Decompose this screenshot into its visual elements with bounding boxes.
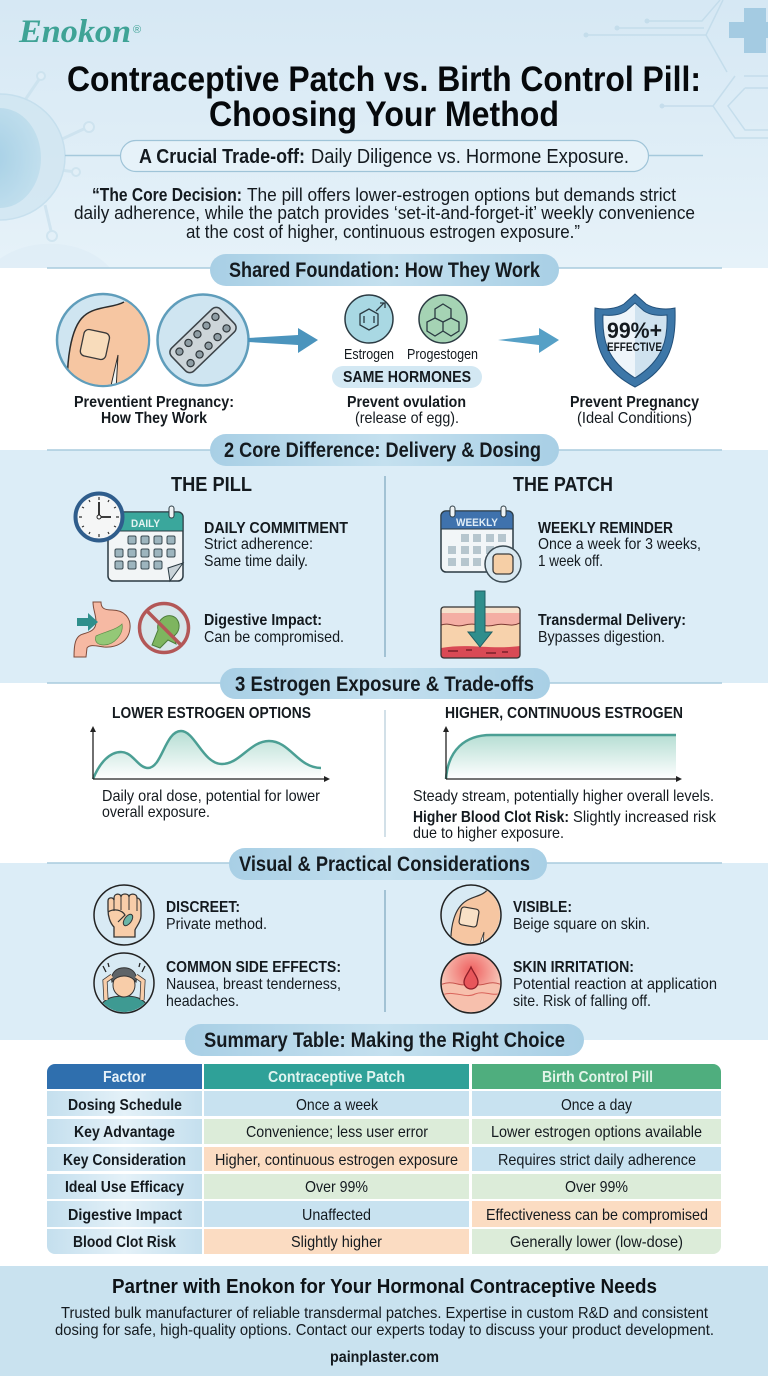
label: progestogen: Progestogen <box>407 347 478 363</box>
subtitle pill: A Crucial Trade-off: <box>139 146 305 168</box>
row: key consideration: Higher, continuous estrogen exposure <box>215 1152 458 1169</box>
section heading: shared foundation <box>47 254 722 286</box>
table header <box>47 1064 721 1089</box>
text: visible <box>513 899 650 933</box>
arrow <box>248 328 318 353</box>
icon: patch on arm <box>57 294 152 392</box>
icon: stomach with pill <box>74 602 130 657</box>
icon: shield 99% effective <box>595 294 675 387</box>
row: ideal use efficacy <box>47 1174 721 1199</box>
row: blood clot risk: Blood Clot Risk <box>73 1234 176 1251</box>
text: daily commitment: Same time daily. <box>204 553 308 570</box>
heading: higher continuous estrogen: HIGHER, CONTINUOUS ESTROGEN <box>445 705 683 722</box>
caption: how they work <box>74 394 234 427</box>
icon: daily calendar and clock <box>76 494 183 581</box>
core decision quote: The pill offers lower-estrogen options but demands strict <box>247 184 676 205</box>
subtitle pill <box>65 140 703 172</box>
caption: how they work: Preventient Pregnancy: <box>74 394 234 411</box>
title: Choosing Your Method <box>209 95 559 134</box>
section heading: summary table: Summary Table: Making the Right Choice <box>204 1029 565 1052</box>
text: higher estrogen description: Slightly increased risk <box>573 809 717 826</box>
decoration: molecular circuit lines and plus <box>584 0 768 138</box>
divider <box>384 476 386 657</box>
row: key advantage: Key Advantage <box>74 1124 175 1141</box>
section heading: shared foundation: Shared Foundation: How They Work <box>229 259 540 282</box>
footer description: dosing for safe, high-quality options. Contact our experts today to discuss your product development. <box>55 1322 714 1339</box>
row: digestive impact <box>47 1201 721 1227</box>
caption: how they work: How They Work <box>101 410 207 427</box>
text: common side effects: headaches. <box>166 993 239 1010</box>
footer heading: Partner with Enokon for Your Hormonal Contraceptive Needs <box>112 1275 657 1298</box>
table header: Contraceptive Patch <box>268 1069 405 1086</box>
text: digestive impact <box>204 612 344 646</box>
title <box>67 60 701 134</box>
panel: higher estrogen <box>413 705 717 842</box>
subtitle pill: Daily Diligence vs. Hormone Exposure. <box>311 146 629 168</box>
icon: weekly calendar with patch: WEEKLY <box>456 517 499 529</box>
icon: daily calendar and clock: DAILY <box>131 518 161 530</box>
text: weekly reminder: Once a week for 3 weeks, <box>538 536 701 553</box>
core decision quote: “The Core Decision: <box>92 184 242 205</box>
text: lower estrogen description: overall exposure. <box>102 804 210 821</box>
text: weekly reminder <box>538 520 701 570</box>
heading: the pill: THE PILL <box>171 474 252 496</box>
row: dosing schedule: Dosing Schedule <box>68 1097 182 1114</box>
text: higher estrogen description: Steady stream, potentially higher overall levels. <box>413 788 714 805</box>
icon: visible patch on skin <box>441 885 505 946</box>
label: estrogen: Estrogen <box>344 347 394 363</box>
panel: patch considerations <box>440 885 717 1015</box>
text: higher estrogen description: due to higher exposure. <box>413 825 564 842</box>
icon: skin irritation <box>440 953 502 1015</box>
caption: prevent ovulation <box>347 394 466 427</box>
section heading: visual and practical: Visual & Practical Considerations <box>239 853 530 876</box>
row: key consideration <box>47 1147 721 1171</box>
panel: lower estrogen <box>90 705 330 821</box>
panel: pill considerations <box>94 885 341 1015</box>
title: Contraceptive Patch vs. Birth Control Pill: <box>67 60 701 99</box>
text: common side effects: COMMON SIDE EFFECTS: <box>166 959 341 976</box>
icon: shield 99% effective: 99%+ <box>607 318 662 343</box>
text: transdermal delivery: Transdermal Delivery: <box>538 612 686 629</box>
panel: the pill <box>74 474 348 657</box>
chart: fluctuating estrogen curve <box>90 726 330 782</box>
row: key advantage <box>47 1119 721 1144</box>
row: key advantage: Lower estrogen options available <box>491 1124 702 1141</box>
row: digestive impact: Digestive Impact <box>68 1207 183 1224</box>
footer panel <box>0 1266 768 1376</box>
text: discreet: DISCREET: <box>166 899 240 916</box>
icon: pill blister pack <box>158 294 248 386</box>
text: lower estrogen description: Daily oral dose, potential for lower <box>102 788 321 805</box>
text: daily commitment: Strict adherence: <box>204 536 313 553</box>
text: weekly reminder: 1 week off. <box>538 553 603 570</box>
icon: weekly calendar with patch <box>441 506 521 582</box>
row: ideal use efficacy: Over 99% <box>565 1179 628 1196</box>
section heading: estrogen exposure: 3 Estrogen Exposure & Trade-offs <box>235 673 534 696</box>
row: key advantage: Convenience; less user error <box>246 1124 429 1141</box>
label: same hormones <box>332 366 482 388</box>
section heading: core difference <box>47 434 722 466</box>
heading: lower estrogen options: LOWER ESTROGEN OPTIONS <box>112 705 311 722</box>
core decision quote <box>74 184 695 242</box>
row: digestive impact: Unaffected <box>302 1207 371 1224</box>
icon: fist hiding pill <box>94 885 154 945</box>
text: digestive impact: Can be compromised. <box>204 629 344 646</box>
row: dosing schedule: Once a day <box>561 1097 632 1114</box>
text: daily commitment: DAILY COMMITMENT <box>204 520 348 537</box>
section heading: estrogen exposure <box>47 668 722 699</box>
text: daily commitment <box>204 520 348 570</box>
core decision quote: at the cost of higher, continuous estrogen exposure.” <box>186 221 580 242</box>
caption: prevent ovulation: (release of egg). <box>355 410 459 427</box>
text: skin irritation: Potential reaction at application <box>513 976 717 993</box>
text: skin irritation <box>513 959 717 1010</box>
row: key consideration: Requires strict daily adherence <box>498 1152 696 1169</box>
row: ideal use efficacy: Over 99% <box>305 1179 368 1196</box>
core decision quote: daily adherence, while the patch provides ‘set-it-and-forget-it’ weekly convenience <box>74 202 695 223</box>
caption: prevent ovulation: Prevent ovulation <box>347 394 466 411</box>
section heading: visual and practical <box>47 848 722 880</box>
caption: prevent pregnancy <box>570 394 699 427</box>
section heading: summary table <box>185 1024 584 1056</box>
row: key consideration: Key Consideration <box>63 1152 186 1169</box>
section heading: core difference: 2 Core Difference: Delivery & Dosing <box>224 439 541 462</box>
caption: prevent pregnancy: (Ideal Conditions) <box>577 410 692 427</box>
text: weekly reminder: WEEKLY REMINDER <box>538 520 673 537</box>
table header: Factor <box>103 1069 146 1086</box>
row: blood clot risk: Slightly higher <box>291 1234 383 1251</box>
divider <box>384 710 386 837</box>
text: discreet <box>166 899 267 933</box>
divider <box>384 890 386 1012</box>
icon: prohibited digestion <box>140 604 188 652</box>
text: skin irritation: SKIN IRRITATION: <box>513 959 634 976</box>
heading: the patch: THE PATCH <box>513 474 613 496</box>
text: discreet: Private method. <box>166 916 267 933</box>
text: visible: VISIBLE: <box>513 899 572 916</box>
text: common side effects <box>166 959 341 1010</box>
summary table <box>47 1064 721 1254</box>
arrow <box>498 328 559 353</box>
row: dosing schedule: Once a week <box>296 1097 379 1114</box>
row: blood clot risk: Generally lower (low-dose) <box>510 1234 683 1251</box>
row: ideal use efficacy: Ideal Use Efficacy <box>65 1179 184 1196</box>
caption: prevent pregnancy: Prevent Pregnancy <box>570 394 699 411</box>
icon: skin layers with arrow <box>441 591 520 658</box>
table header: Birth Control Pill <box>542 1069 653 1086</box>
footer description <box>55 1305 714 1339</box>
icon: progestogen molecule <box>419 295 467 343</box>
text: skin irritation: site. Risk of falling off. <box>513 993 651 1010</box>
panel: the patch <box>441 474 701 658</box>
footer website: painplaster.com <box>330 1349 439 1366</box>
text: common side effects: Nausea, breast tenderness, <box>166 976 341 993</box>
icon: shield 99% effective: EFFECTIVE <box>607 342 662 354</box>
icon: person with headache <box>94 953 154 1015</box>
row: digestive impact: Effectiveness can be compromised <box>486 1207 708 1224</box>
footer description: Trusted bulk manufacturer of reliable transdermal patches. Expertise in custom R&D and consistent <box>61 1305 709 1322</box>
text: higher estrogen description: Higher Blood Clot Risk: <box>413 809 569 826</box>
chart: steady estrogen curve <box>443 726 682 782</box>
logo: ® <box>133 24 141 36</box>
text: transdermal delivery <box>538 612 686 646</box>
text: transdermal delivery: Bypasses digestion. <box>538 629 665 646</box>
panel: shared foundation <box>57 294 699 427</box>
row: dosing schedule <box>47 1091 721 1116</box>
text: higher estrogen description <box>413 788 717 842</box>
icon: estrogen molecule <box>345 295 393 343</box>
logo: Enokon <box>18 14 131 50</box>
text: visible: Beige square on skin. <box>513 916 650 933</box>
row: blood clot risk <box>47 1229 721 1254</box>
label: same hormones: SAME HORMONES <box>343 369 471 386</box>
text: digestive impact: Digestive Impact: <box>204 612 322 629</box>
decoration: cell illustration <box>0 72 110 268</box>
text: lower estrogen description <box>102 788 321 821</box>
